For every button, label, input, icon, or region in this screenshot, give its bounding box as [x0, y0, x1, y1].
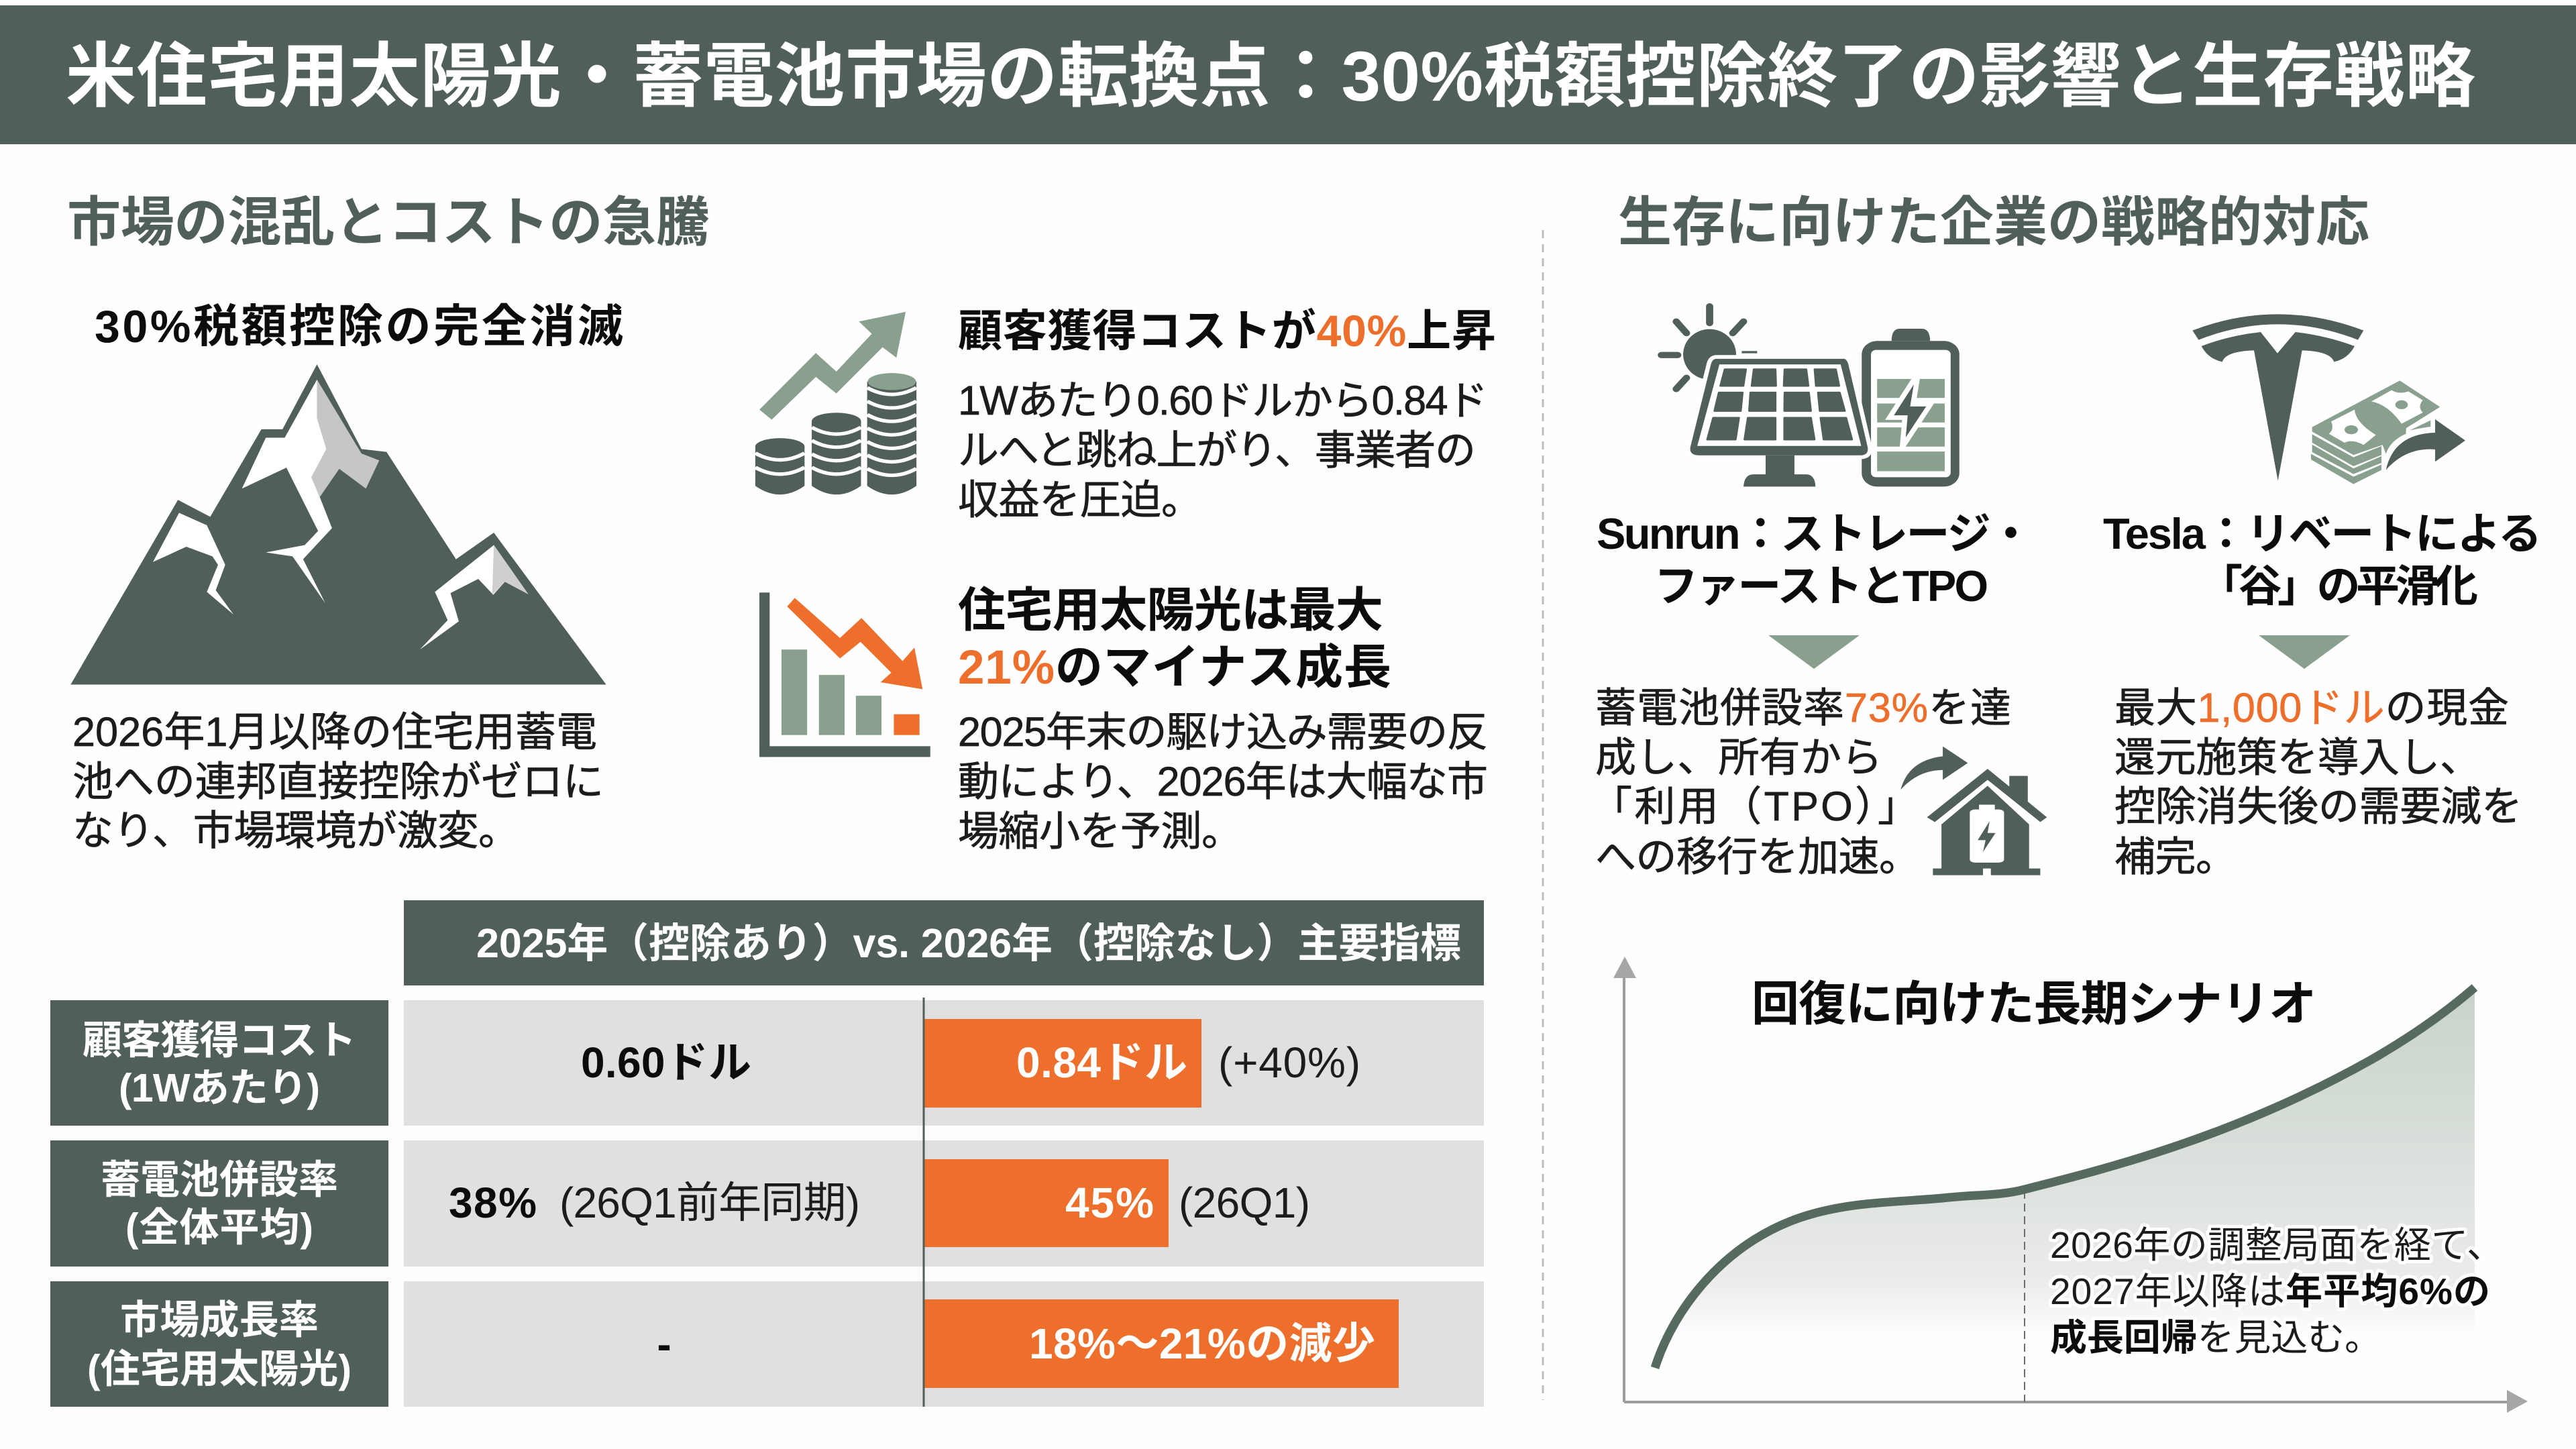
- heading: residential solar decline: [958, 584, 1391, 694]
- panel: tax credit elimination: [70, 301, 623, 853]
- row: acquisition cost: 顧客獲得コスト: [83, 1018, 356, 1063]
- panel: acquisition cost: [755, 306, 1496, 523]
- icon: solar panel and battery: [1662, 307, 1960, 486]
- icon: house with battery and arrow: [1900, 747, 2047, 875]
- section heading: corporate strategy: 生存に向けた企業の戦略的対応: [1618, 193, 2369, 252]
- body: Tesla: 最大1,000ドルの現金: [2114, 685, 2509, 731]
- chart title: 回復に向けた長期シナリオ: [1752, 978, 2316, 1031]
- chart: recovery scenario: [1613, 957, 2528, 1413]
- row: battery attach rate: 38%: [449, 1179, 537, 1227]
- row: market growth: (住宅用太陽光): [87, 1347, 352, 1391]
- chart annotation: 2026年の調整局面を経て、: [2050, 1224, 2504, 1266]
- body: tax credit: [72, 709, 604, 853]
- body: residential solar decline: [958, 709, 1488, 854]
- body: Tesla: [2114, 685, 2522, 879]
- body: acquisition cost: 収益を圧迫。: [958, 477, 1202, 523]
- body: Sunrun: 「利用（TPO）」: [1591, 784, 1919, 829]
- panel: residential solar decline: [759, 584, 1488, 854]
- body: residential solar decline: 2025年末の駆け込み需要の反: [958, 709, 1488, 755]
- icon: coins and rising arrow: [755, 312, 916, 494]
- chart annotation: [2050, 1224, 2504, 1358]
- table header: 2025年（控除あり）vs. 2026年（控除なし）主要指標: [476, 920, 1461, 966]
- row: battery attach rate: (26Q1): [1179, 1179, 1310, 1227]
- body: Tesla: 控除消失後の需要減を: [2114, 784, 2522, 829]
- chart annotation: 成長回帰を見込む。: [2050, 1317, 2381, 1358]
- section heading: market turmoil: 市場の混乱とコストの急騰: [67, 193, 710, 252]
- row: battery attach rate: [50, 1140, 1484, 1267]
- heading: Sunrun: ファーストとTPO: [1654, 561, 1988, 610]
- heading: residential solar decline: 住宅用太陽光は最大: [958, 584, 1383, 637]
- row: market growth: -: [657, 1320, 672, 1368]
- row: acquisition cost: 0.84ドル: [1016, 1038, 1187, 1087]
- header banner: [0, 5, 2576, 144]
- heading: Sunrun: [1597, 509, 2033, 610]
- row: battery attach rate: (26Q1前年同期): [559, 1179, 860, 1227]
- body: Sunrun: 蓄電池併設率73%を達: [1595, 685, 2011, 731]
- body: tax credit: なり、市場環境が激変。: [72, 808, 519, 853]
- title: 米住宅用太陽光・蓄電池市場の転換点：30%税額控除終了の影響と生存戦略: [66, 38, 2475, 116]
- heading: acquisition cost: 顧客獲得コストが40%上昇: [958, 306, 1496, 356]
- row: battery attach rate: 蓄電池併設率: [101, 1158, 338, 1202]
- icon: Tesla logo and cash stack: [2192, 314, 2465, 484]
- y axis: [1613, 957, 1636, 1402]
- body: residential solar decline: 動により、2026年は大幅な市: [958, 759, 1488, 804]
- body: tax credit: 2026年1月以降の住宅用蓄電: [72, 709, 597, 755]
- row: acquisition cost: (+40%): [1218, 1038, 1360, 1087]
- panel: Sunrun: [1591, 307, 2047, 879]
- body: Tesla: 還元施策を導入し、: [2114, 735, 2481, 780]
- body: Sunrun: [1591, 685, 2011, 879]
- body: Tesla: 補完。: [2114, 834, 2237, 879]
- chart annotation: 2027年以降は年平均6%の: [2050, 1271, 2490, 1312]
- row: acquisition cost: (1Wあたり): [119, 1066, 320, 1110]
- body: residential solar decline: 場縮小を予測。: [958, 808, 1242, 854]
- heading: Tesla: Tesla：リベートによる: [2103, 509, 2542, 558]
- heading: tax credit: 30%税額控除の完全消滅: [95, 301, 623, 352]
- row: battery attach rate: 45%: [1065, 1179, 1154, 1227]
- comparison table: [50, 900, 1484, 1407]
- body: acquisition cost: [958, 378, 1488, 523]
- body: Sunrun: への移行を加速。: [1595, 834, 1920, 879]
- row: market growth: 市場成長率: [120, 1298, 319, 1342]
- icon: cracked mountain: [70, 364, 606, 685]
- row: acquisition cost: 0.60ドル: [581, 1038, 751, 1087]
- arrow: Sunrun: [1768, 635, 1860, 669]
- arrow: Tesla: [2259, 635, 2350, 669]
- x axis: [1624, 1390, 2528, 1413]
- heading: Tesla: 「谷」の平滑化: [2199, 561, 2478, 610]
- panel: Tesla: [2103, 314, 2542, 879]
- heading: Tesla: [2103, 509, 2542, 610]
- recovery curve: [1655, 987, 2475, 1368]
- body: acquisition cost: ルへと跳ね上がり、事業者の: [958, 427, 1476, 473]
- body: tax credit: 池への連邦直接控除がゼロに: [72, 759, 604, 804]
- table header: [404, 900, 1484, 985]
- heading: residential solar decline: 21%のマイナス成長: [958, 641, 1391, 694]
- heading: Sunrun: Sunrun：ストレージ・: [1597, 509, 2033, 558]
- row: battery attach rate: (全体平均): [125, 1205, 313, 1250]
- row: market growth: 18%～21%の減少: [1029, 1320, 1375, 1368]
- area under curve: [1655, 987, 2475, 1368]
- icon: falling bar chart: [759, 592, 930, 757]
- row: acquisition cost: [50, 1000, 1484, 1126]
- body: Sunrun: 成し、所有から: [1595, 735, 1882, 780]
- body: acquisition cost: 1Wあたり0.60ドルから0.84ド: [958, 378, 1488, 423]
- row: market growth: [50, 1281, 1484, 1407]
